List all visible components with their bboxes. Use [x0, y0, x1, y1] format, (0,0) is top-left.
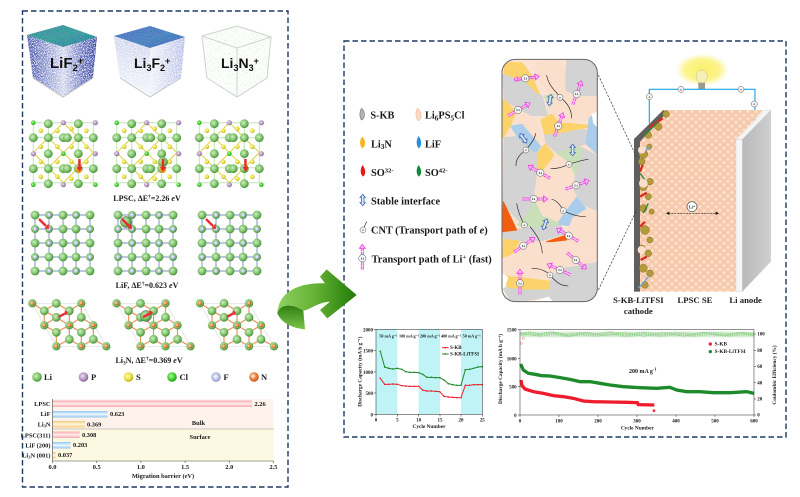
battery labels: S-KB-LiTFSI: [613, 295, 664, 305]
legend: interface components: SO: [425, 168, 439, 179]
legend: interface components: 6: [435, 113, 439, 122]
chart: rate capability: 15: [437, 418, 443, 423]
legend: interface components: 2-: [442, 168, 448, 175]
cube: Li3N3+: [202, 26, 271, 97]
legend: interface components: Stable interface: [371, 197, 441, 208]
caption: LiF barrier: †: [142, 281, 145, 287]
chart: migration barrier bars: Bulk: [192, 420, 206, 427]
panel: right dashed frame: [344, 41, 786, 437]
glow and light bulb: [677, 55, 728, 89]
chart: long-term cycling: 40: [757, 381, 763, 386]
chart: rate capability: S-KB-LiTFSI: [450, 352, 479, 357]
chart: long-term cycling: 0: [514, 414, 517, 419]
chart: rate capability: [357, 328, 485, 430]
cube: Li3N3+: +: [254, 56, 259, 66]
chart: migration barrier bars: 3: [44, 424, 47, 428]
legend: interface components: 5: [450, 113, 454, 122]
chart: rate capability: 1000: [363, 371, 374, 376]
chart: migration barrier bars: LPSC(311): [21, 432, 50, 440]
Li+ migration arrow: Li⁺: [689, 204, 695, 209]
chart: migration barrier bars: 2.5: [270, 464, 278, 471]
chart: migration barrier bars: LPSC: [34, 401, 51, 408]
legend: atom species: P: [91, 372, 96, 382]
panel: ToF-SIMS 3D cubes: [27, 25, 271, 97]
caption: Li3N barrier: †: [146, 356, 149, 362]
chart: long-term cycling: 60: [757, 365, 763, 370]
cube: Li3N3+: 3: [233, 63, 238, 73]
battery labels: Li anode: [729, 295, 762, 305]
chart: long-term cycling: 1500: [507, 329, 517, 334]
legend: interface components: [359, 108, 492, 270]
caption: Li3N barrier: N, ΔE: [126, 356, 146, 365]
legend: interface components: Cl: [454, 111, 465, 122]
caption: Li3N barrier: 3: [123, 360, 126, 366]
chart: rate capability: 2000: [363, 328, 374, 333]
chart: long-term cycling: 200: [594, 419, 602, 424]
legend: interface components: LiF: [425, 139, 441, 150]
external circuit wire: [646, 86, 757, 123]
chart: rate capability: 1500: [363, 350, 374, 355]
cube: Li3F2+: [114, 26, 185, 97]
cube: Li3F2+: 2: [160, 63, 165, 73]
caption: Li3N barrier: Li: [115, 356, 123, 365]
chart: migration barrier bars: 0.203: [73, 442, 87, 449]
cube: Li3F2+: 3: [146, 63, 151, 73]
chart: migration barrier bars: 0.5: [93, 464, 101, 471]
legend: interface components: 4: [439, 168, 443, 175]
chart: rate capability: 5: [396, 418, 399, 423]
chart: migration barrier bars: 1.0: [137, 464, 145, 471]
cube: Li3F2+: +: [165, 56, 170, 66]
chart: migration barrier bars: 0.037: [58, 452, 73, 459]
caption: LPSC barrier: †: [148, 194, 151, 200]
caption: LiF barrier: eV: [169, 281, 178, 290]
chart: long-term cycling: 600: [750, 419, 758, 424]
legend: interface components: Transport path of Li: [372, 254, 462, 265]
chart: long-term cycling: S-KB: [715, 341, 728, 347]
chart: migration barrier bars: Surface: [190, 434, 211, 441]
legend: interface components: Li: [425, 111, 435, 122]
legend: interface components: 2-: [388, 168, 394, 175]
legend: atom species: N: [261, 372, 268, 382]
chart: rate capability: 25: [480, 418, 485, 423]
chart: rate capability: 400 mA g⁻¹: [441, 333, 462, 338]
legend: atom species: F: [224, 372, 229, 382]
chart: long-term cycling: Coulombic Efficiency (%): [771, 345, 778, 405]
chart: long-term cycling: -1: [653, 367, 657, 372]
chart: rate capability: 100 mA g⁻¹: [399, 333, 420, 338]
chart: long-term cycling: 200 mA g: [629, 369, 653, 375]
cube: LiF2+: 2: [72, 63, 78, 74]
Li+ migration arrow: [666, 202, 719, 215]
chart: migration barrier bars: 0.369: [87, 422, 101, 428]
panel: LPSC migration structures: [29, 119, 264, 188]
chart: migration barrier bars: Li: [22, 452, 28, 460]
legend: interface components: Li: [371, 139, 381, 150]
chart: rate capability: 0: [370, 413, 373, 418]
battery labels: cathode: [624, 306, 653, 316]
legend: interface components: 3: [381, 142, 385, 151]
caption: LPSC barrier: =2.26: [151, 194, 171, 203]
chart: rate capability: 50 mA g⁻¹: [379, 333, 398, 338]
caption: LiF barrier: LiF, ΔE: [116, 281, 142, 290]
cube: Li3F2+: F: [151, 55, 160, 71]
chart: long-term cycling: S-KB-LiTFSI: [715, 349, 746, 355]
caption: Li3N barrier: eV: [173, 356, 183, 365]
chart: rate capability: 50 mA g⁻¹: [463, 333, 481, 338]
chart: long-term cycling: 0: [757, 414, 760, 419]
legend: interface components: +: [462, 254, 466, 261]
panel: left dashed frame: [22, 11, 288, 487]
chart: migration barrier bars: 0.308: [82, 432, 96, 439]
caption: LPSC barrier: LPSC, ΔE: [113, 194, 148, 203]
chart: long-term cycling: 20: [757, 398, 763, 403]
diagram: magnified cathode microstructure: [502, 59, 597, 302]
chart: long-term cycling: 400: [672, 419, 680, 424]
chart: long-term cycling: 500: [711, 419, 719, 424]
chart: migration barrier bars: 2.0: [225, 464, 233, 471]
chart: migration barrier bars: Migration barrier (eV): [132, 473, 194, 480]
battery labels: [613, 295, 762, 316]
chart: migration barrier bars: 3: [28, 454, 31, 460]
chart: long-term cycling: Discharge Capacity (mA h g⁻¹): [497, 334, 504, 404]
legend: atom species: S: [136, 372, 141, 382]
chart: rate capability: 20: [458, 418, 464, 423]
legend: interface components: CNT (Transport path of e): [371, 225, 488, 236]
chart: rate capability: 200 mA g⁻¹: [420, 333, 441, 338]
chart: long-term cycling: 0: [519, 419, 522, 424]
chart: migration barrier bars: LiF: [41, 411, 51, 418]
chart: long-term cycling: 1000: [507, 357, 517, 362]
legend: interface components: S-KB: [370, 111, 395, 122]
caption: Li3N barrier: =0.369: [149, 356, 173, 365]
caption: LiF barrier: =0.623: [144, 281, 169, 290]
panel: Li3N migration structures: [28, 299, 278, 350]
cathode layer: [634, 110, 669, 292]
chart: long-term cycling: 500: [509, 386, 517, 391]
legend: atom species: Li: [44, 372, 53, 382]
chart: migration barrier bars: LiF (200): [25, 442, 50, 450]
cube: Li3N3+: 3: [249, 63, 254, 73]
cube: Li3N3+: N: [238, 55, 249, 71]
battery labels: LPSC SE: [678, 295, 713, 305]
chart: long-term cycling: 100: [555, 419, 563, 424]
zoom guide lines: [598, 75, 637, 290]
chart: migration barrier bars: 2.26: [254, 401, 266, 408]
legend: interface components: N: [384, 139, 392, 150]
legend: interface components: 3: [385, 168, 389, 175]
chart: rate capability: 10: [416, 418, 422, 423]
legend: interface components: PS: [438, 111, 451, 122]
chart: rate capability: 0: [375, 418, 378, 423]
chart: migration barrier bars: N (001): [30, 452, 50, 460]
legend: atom species: Cl: [180, 372, 189, 382]
cube: Li3N3+: Li: [221, 55, 233, 71]
chart: migration barrier bars: 0.623: [110, 411, 124, 418]
chart: rate capability: Cycle Number: [412, 424, 446, 430]
cube: LiF2+: +: [78, 56, 84, 67]
diagram: solid-state battery cell: [598, 55, 771, 316]
cube: LiF2+: LiF: [50, 55, 72, 72]
chart: migration barrier bars: Li: [38, 422, 44, 428]
legend: interface components: SO: [371, 168, 385, 179]
chart: rate capability: 500: [366, 392, 373, 397]
chart: long-term cycling: 100: [757, 333, 765, 338]
chart: migration barrier bars: N: [46, 422, 51, 428]
chart: migration barrier bars: [21, 399, 278, 480]
legend: atom species: [32, 372, 268, 382]
chart: long-term cycling: Cycle Number: [621, 426, 654, 432]
legend: interface components: (fast): [466, 254, 492, 265]
chart: migration barrier bars: 0.0: [48, 464, 56, 471]
cube: Li3F2+: Li: [134, 55, 146, 71]
panel: LiF migration structures: [31, 211, 261, 275]
Li anode: [736, 110, 771, 292]
chart: rate capability: S-KB: [450, 346, 462, 351]
chart: long-term cycling: 80: [757, 349, 763, 354]
LPSC solid electrolyte: [635, 110, 763, 292]
caption: LPSC barrier: eV: [171, 194, 181, 203]
chart: long-term cycling: [497, 329, 778, 432]
arrow: green curved arrow: [277, 269, 357, 329]
chart: migration barrier bars: 1.5: [181, 464, 189, 471]
cube: LiF2+: [27, 25, 97, 97]
chart: long-term cycling: 300: [633, 419, 641, 424]
chart: rate capability: Discharge Capacity (mA h g⁻¹): [357, 336, 364, 407]
